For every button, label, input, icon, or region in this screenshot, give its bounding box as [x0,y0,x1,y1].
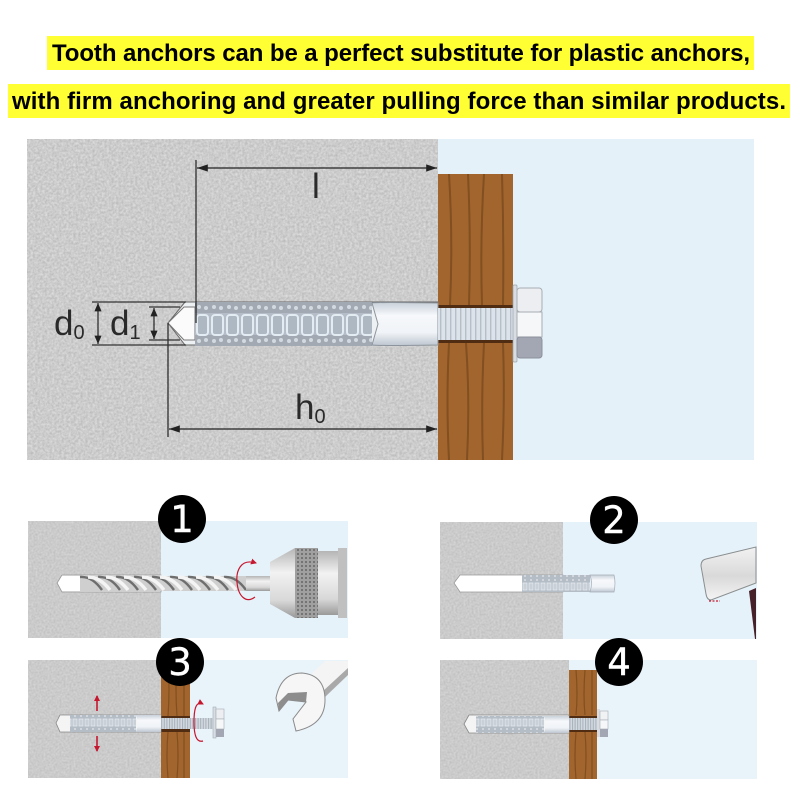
background [569,660,757,779]
dimension d1: 1 [129,322,141,344]
badge 3: 3 [168,641,192,684]
badge 1: 1 [170,498,194,541]
panel: step 2 insert anchor [440,496,757,639]
background [190,660,348,778]
dimension d0: 0 [73,322,85,344]
background [161,521,348,638]
dimension d0 [54,302,186,345]
panel: step 3 tighten bolt [28,638,348,778]
anchor tip [168,307,195,340]
badge 4 [595,638,643,686]
panel: main anchor cross-section diagram [27,139,754,460]
badge 2 [590,496,638,544]
concrete [440,522,563,639]
expansion arrows [96,696,98,751]
concrete [28,660,161,778]
dimension d1 [110,304,180,344]
sleeve [372,302,438,346]
anchor body [168,285,542,362]
rotation arrow [237,562,256,600]
hole and anchor [454,575,615,592]
drill hole [168,302,438,345]
rotation arrow [194,703,203,741]
toothed section [195,302,372,346]
badge 4: 4 [607,641,631,684]
wooden plate [438,174,513,460]
open space background [438,139,754,460]
title: highlighted headline [8,36,790,118]
drill chuck [270,548,347,618]
background [563,522,757,639]
wrench [276,661,348,731]
dimension d0: d [54,304,73,343]
dimension d1: d [110,304,129,343]
flange [513,285,517,362]
hex nut [517,288,542,358]
hammer head [701,547,756,600]
badge 3 [156,638,204,686]
wrench handle [312,661,348,697]
headline line 2: with firm anchoring and greater pulling force than similar products. [11,88,786,115]
wood plate [569,670,597,779]
threaded bolt [438,308,513,340]
dimension h0: 0 [314,406,326,428]
dimension h0: h [295,388,314,427]
panel: step 4 finished anchor [440,638,757,779]
panel: step 1 drilling [28,495,348,638]
headline line 1: Tooth anchors can be a perfect substitute for plastic anchors, [52,40,750,67]
concrete [440,660,569,779]
dimension l: l [312,167,320,206]
concrete wall [27,139,438,460]
drill bit [57,575,271,592]
concrete [28,521,161,638]
badge 1 [158,495,206,543]
hammer strike mark [709,600,720,602]
dimension h0 [168,323,437,437]
wrench head [276,673,325,731]
badge 2: 2 [602,499,626,542]
wood plate [161,660,190,778]
wrench jaw shadow [278,692,307,711]
anchor and bolt [464,709,608,737]
anchor and bolt [56,707,224,738]
hammer handle [749,588,756,639]
